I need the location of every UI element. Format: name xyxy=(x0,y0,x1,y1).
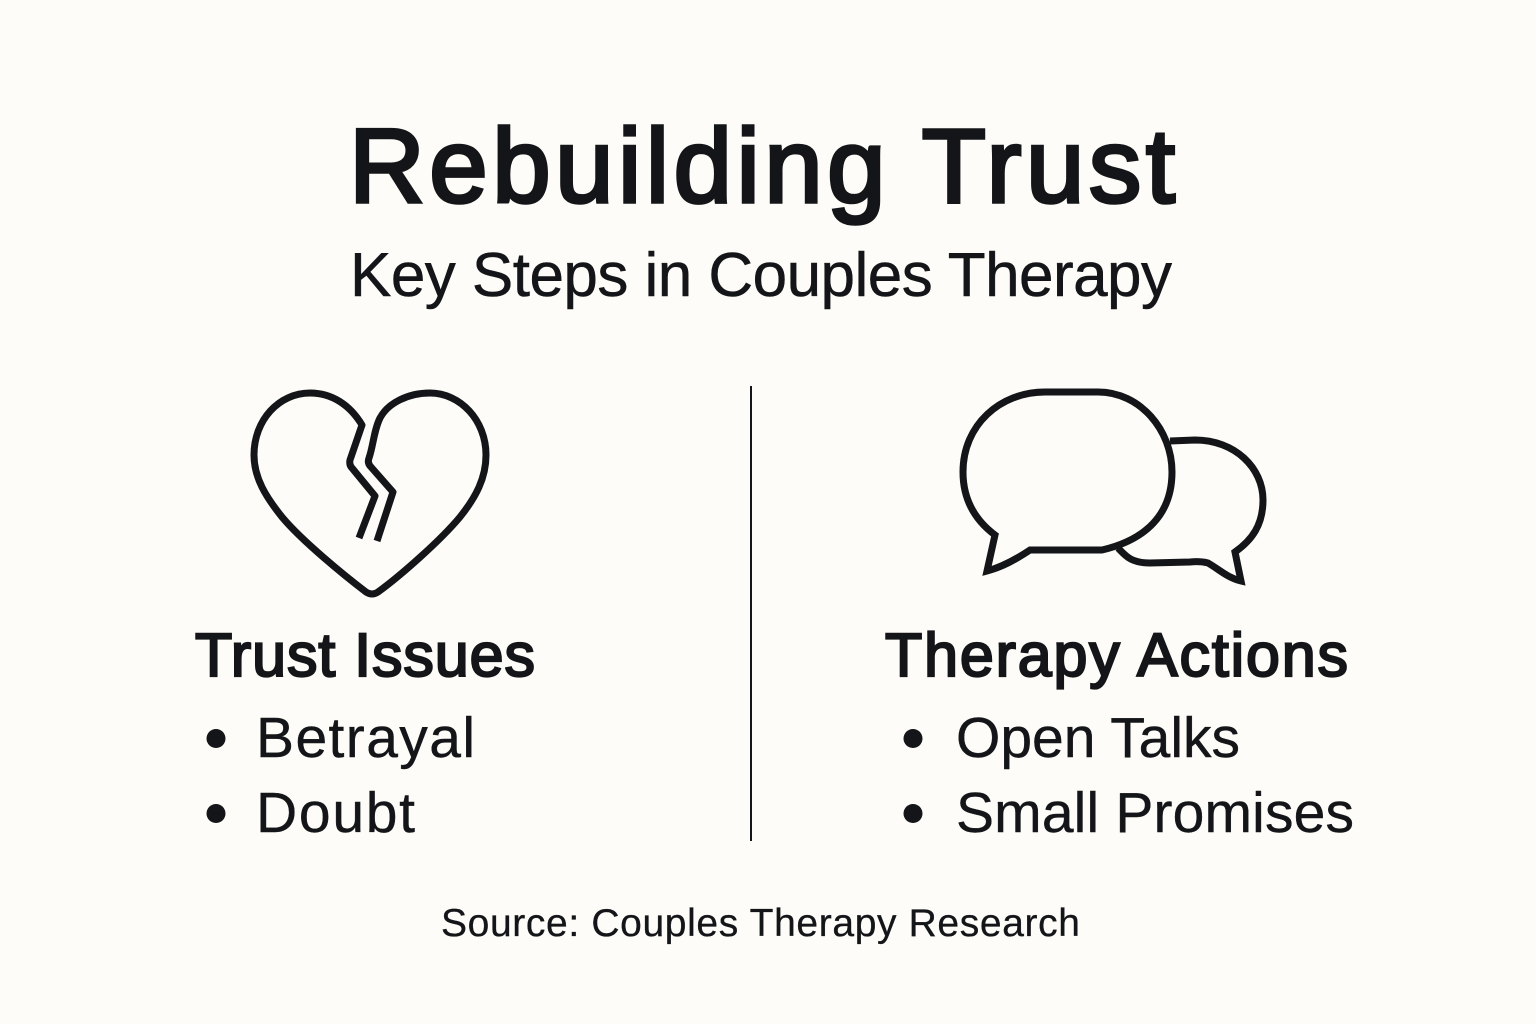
list: trust issues xyxy=(206,706,475,845)
panel: therapy actions xyxy=(885,392,1354,845)
center divider line xyxy=(750,386,752,841)
icon: broken heart xyxy=(254,393,486,594)
item: doubt: Doubt xyxy=(256,781,415,845)
item: small promises: Small Promises xyxy=(956,781,1354,845)
icon: speech bubbles xyxy=(963,392,1263,581)
panel: trust issues xyxy=(195,393,535,845)
heading: therapy actions: Therapy Actions xyxy=(885,621,1348,689)
bullet: open talks xyxy=(904,729,922,748)
item: open talks: Open Talks xyxy=(956,706,1240,770)
item: betrayal: Betrayal xyxy=(256,706,475,770)
bullet: betrayal xyxy=(206,729,226,748)
title: Rebuilding Trust xyxy=(349,108,1175,225)
list: therapy actions xyxy=(904,706,1354,845)
subtitle: Key Steps in Couples Therapy xyxy=(350,241,1172,310)
heading: trust issues: Trust Issues xyxy=(195,621,535,689)
source note: Source: Couples Therapy Research xyxy=(441,902,1080,945)
bullet: small promises xyxy=(904,804,922,823)
bullet: doubt xyxy=(206,804,226,823)
